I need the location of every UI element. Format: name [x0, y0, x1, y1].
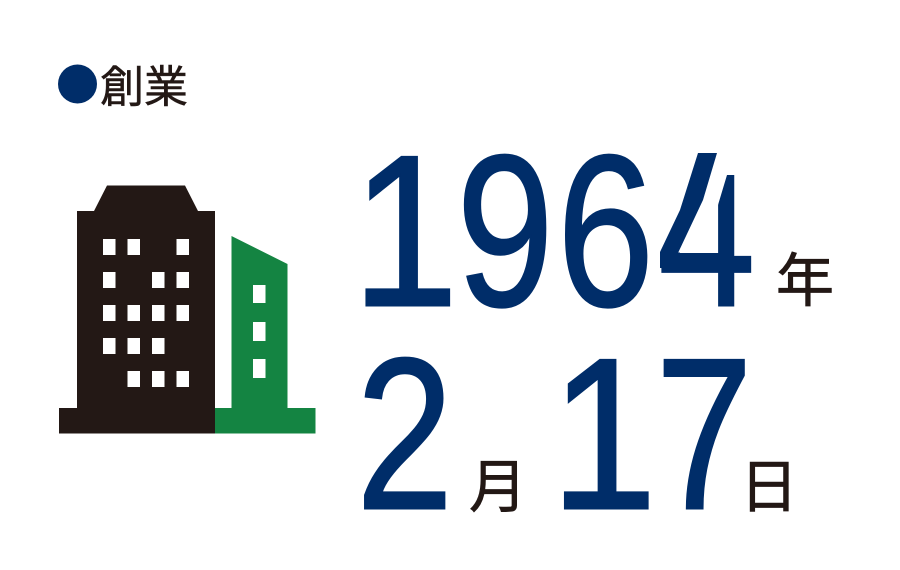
- heading text: 創業: [100, 63, 188, 112]
- date: February 17: [356, 313, 798, 555]
- heading: founding: [58, 63, 188, 112]
- year number, remaining digits: 964: [456, 110, 755, 352]
- year: 1964: [352, 110, 834, 352]
- day number, first digit: 1: [550, 314, 657, 555]
- day number, second digit: 7: [655, 313, 753, 555]
- month unit: 月: [469, 455, 527, 520]
- heading bullet: [58, 64, 97, 104]
- year unit: 年: [776, 249, 834, 314]
- icon: buildings: [59, 186, 316, 434]
- black building: [59, 186, 215, 434]
- numeral 4 gap: white cut above the crossbar: [655, 147, 760, 252]
- green building: [215, 236, 316, 434]
- month number: 2: [356, 313, 453, 555]
- day unit: 日: [740, 455, 798, 520]
- numeral 4 diagonal stroke: [660, 153, 720, 268]
- year number, first digit: 1: [352, 111, 459, 352]
